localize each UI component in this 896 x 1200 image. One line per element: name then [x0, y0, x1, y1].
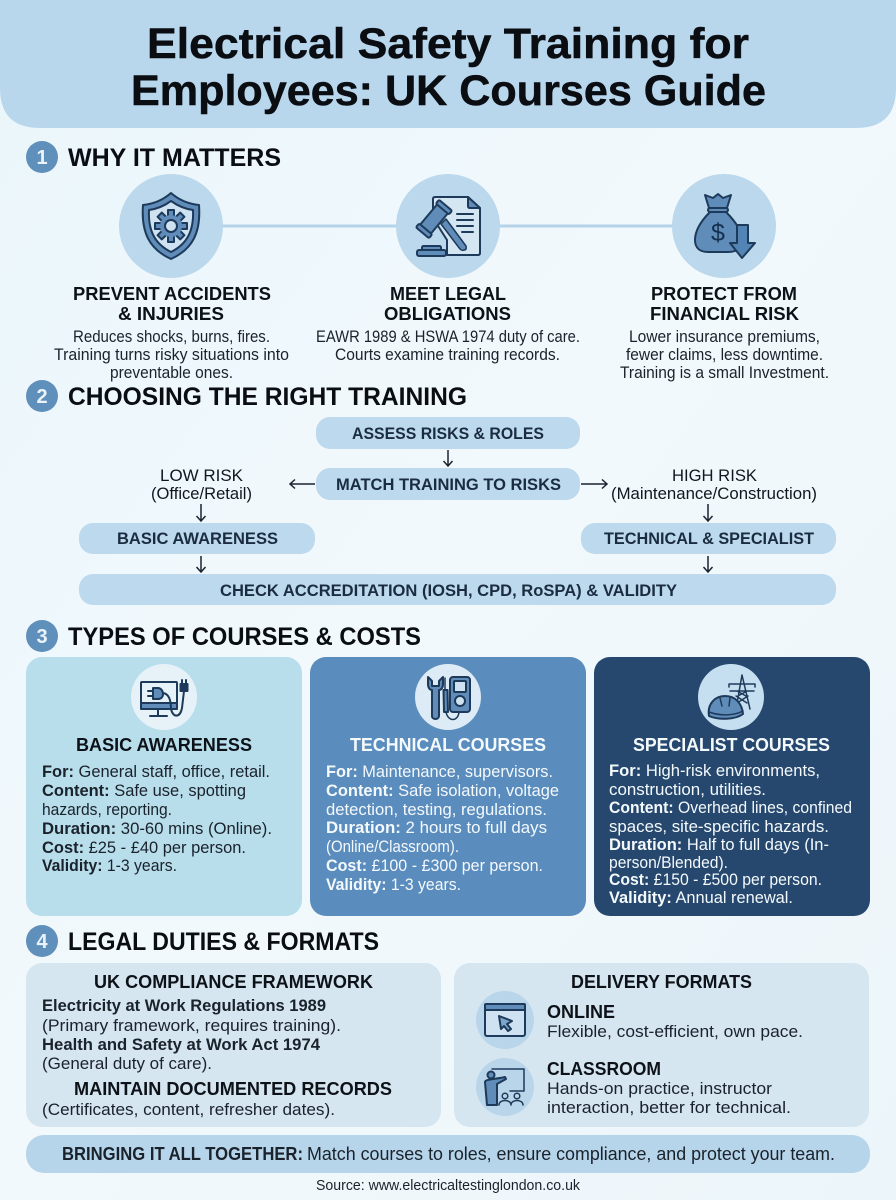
course details: basic awareness: Content: Safe use, spotting [42, 782, 246, 800]
course details: specialist: Duration: Half to full days (In- [609, 836, 829, 854]
label: high risk: (Maintenance/Construction) [611, 484, 817, 503]
panel: UK compliance framework: Electricity at Work Regulations 1989 [42, 997, 326, 1015]
source line: Source: www.electricaltestinglondon.co.uk [316, 1178, 581, 1194]
course details: specialist: For: High-risk environments, [609, 762, 820, 780]
arrow: low risk to basic awareness [196, 504, 206, 521]
icon: hard hat and pylon [698, 664, 764, 730]
item: protect from financial risk: Training is a small Investment. [620, 364, 829, 382]
item: protect from financial risk: PROTECT FROM [651, 284, 797, 304]
format: online: ONLINE [547, 1002, 615, 1022]
course details: basic awareness [42, 763, 272, 875]
section 1 heading: WHY IT MATTERS [68, 144, 281, 172]
panel: specialist courses [594, 657, 870, 916]
item: protect from financial risk [620, 284, 829, 382]
box: technical and specialist: TECHNICAL & SPECIALIST [604, 529, 815, 548]
section 2 heading: CHOOSING THE RIGHT TRAINING [68, 383, 467, 411]
item: meet legal obligations: EAWR 1989 & HSWA 1974 duty of care. [316, 328, 580, 346]
course details: basic awareness: For: General staff, office, retail. [42, 763, 270, 781]
box: technical and specialist [581, 523, 836, 554]
icon: money bag with down arrow [672, 174, 776, 278]
arrow: high risk to technical [704, 504, 712, 521]
panel: basic awareness course [26, 657, 302, 916]
item: prevent accidents: & INJURIES [118, 304, 224, 324]
panel: UK compliance framework: MAINTAIN DOCUMENTED RECORDS [74, 1079, 392, 1099]
heading: specialist courses: SPECIALIST COURSES [633, 735, 830, 755]
label: low risk: LOW RISK [160, 466, 244, 485]
course details: basic awareness: Duration: 30-60 mins (Online). [42, 820, 272, 838]
box: assess risks and roles: ASSESS RISKS & ROLES [352, 424, 544, 443]
summary bar [26, 1135, 870, 1173]
panel: UK compliance framework: UK COMPLIANCE FRAMEWORK [94, 972, 373, 992]
format: classroom: interaction, better for technical. [547, 1099, 791, 1117]
course details: specialist: person/Blended). [609, 854, 728, 872]
arrow: assess to match [444, 450, 452, 466]
item: meet legal obligations: OBLIGATIONS [384, 304, 511, 324]
panel: technical courses [310, 657, 586, 916]
box: basic awareness: BASIC AWARENESS [117, 529, 278, 548]
icon: classroom instructor [476, 1058, 534, 1116]
section 1: why it matters [26, 141, 829, 382]
icon: shield with gear [119, 174, 223, 278]
section 4 heading: LEGAL DUTIES & FORMATS [68, 928, 379, 956]
item: prevent accidents [54, 284, 289, 382]
course details: technical: (Online/Classroom). [326, 838, 459, 856]
course details: technical [326, 763, 559, 894]
format: online [547, 1002, 803, 1041]
course details: technical: For: Maintenance, supervisors. [326, 763, 553, 781]
section 3: types of courses and costs [26, 620, 870, 916]
section 3 heading: 3 [36, 626, 48, 648]
icon: wrench and multimeter [415, 664, 481, 730]
section 2 heading: 2 [36, 386, 48, 408]
item: protect from financial risk: Lower insurance premiums, [629, 328, 820, 346]
summary bar: Match courses to roles, ensure compliance, and protect your team. [307, 1144, 835, 1164]
arrow: basic to accreditation [196, 556, 206, 572]
item: prevent accidents: Training turns risky situations into [54, 346, 289, 364]
icon: browser with cursor [476, 991, 534, 1049]
panel: UK compliance framework: (Primary framework, requires training). [42, 1017, 341, 1035]
course details: specialist: spaces, site-specific hazards. [609, 818, 829, 836]
panel: UK compliance framework [26, 963, 441, 1127]
course details: technical: Content: Safe isolation, voltage [326, 782, 559, 800]
heading: technical courses: TECHNICAL COURSES [350, 735, 546, 755]
course details: technical: Duration: 2 hours to full days [326, 819, 547, 837]
panel: delivery formats [454, 963, 869, 1127]
format: classroom: CLASSROOM [547, 1059, 661, 1079]
arrow: to high risk [581, 480, 607, 488]
section 1 heading: 1 [36, 147, 48, 169]
title: Electrical Safety Training for [147, 20, 749, 68]
icon: monitor and plug [131, 664, 197, 730]
box: match training to risks: MATCH TRAINING TO RISKS [336, 475, 561, 494]
box: assess risks and roles [316, 417, 580, 449]
format: classroom: Hands-on practice, instructor [547, 1080, 773, 1098]
panel: delivery formats: DELIVERY FORMATS [571, 972, 752, 992]
box: basic awareness [79, 523, 315, 554]
format: classroom [547, 1059, 791, 1117]
item: protect from financial risk: fewer claims, less downtime. [626, 346, 823, 364]
summary bar: BRINGING IT ALL TOGETHER: [62, 1144, 303, 1164]
format: online: Flexible, cost-efficient, own pace. [547, 1023, 803, 1041]
course details: technical: detection, testing, regulations. [326, 801, 547, 819]
item: protect from financial risk: FINANCIAL RISK [650, 304, 799, 324]
box: match training to risks [316, 468, 580, 500]
box: check accreditation [79, 574, 836, 605]
course details: specialist: Validity: Annual renewal. [609, 889, 793, 907]
box: check accreditation: CHECK ACCREDITATION (IOSH, CPD, RoSPA) & VALIDITY [220, 581, 678, 600]
title: Employees: UK Courses Guide [131, 67, 766, 115]
icon: gavel and document [396, 174, 500, 278]
section 4: legal duties and formats [26, 925, 869, 1127]
course details: basic awareness: Cost: £25 - £40 per person. [42, 839, 246, 857]
course details: technical: Validity: 1-3 years. [326, 876, 461, 894]
label: low risk [151, 466, 252, 503]
heading: basic awareness: BASIC AWARENESS [76, 735, 252, 755]
panel: UK compliance framework: (General duty of care). [42, 1055, 212, 1073]
panel: UK compliance framework: Health and Safety at Work Act 1974 [42, 1036, 321, 1054]
course details: specialist: Cost: £150 - £500 per person. [609, 871, 822, 889]
item: meet legal obligations: Courts examine training records. [335, 346, 560, 364]
title banner [0, 0, 896, 128]
label: high risk [611, 466, 817, 503]
section 2: choosing the right training [26, 380, 836, 605]
course details: specialist: construction, utilities. [609, 781, 766, 799]
item: prevent accidents: Reduces shocks, burns, fires. [73, 328, 270, 346]
course details: basic awareness: Validity: 1-3 years. [42, 857, 177, 875]
arrow: to low risk [290, 480, 315, 488]
course details: specialist [609, 762, 852, 907]
label: high risk: HIGH RISK [672, 466, 758, 485]
course details: specialist: Content: Overhead lines, confined [609, 799, 852, 817]
icon: money bag with down arrow: $ [711, 219, 725, 247]
section 3 heading: TYPES OF COURSES & COSTS [68, 623, 421, 651]
item: meet legal obligations [316, 284, 580, 364]
item: prevent accidents: preventable ones. [110, 364, 233, 382]
item: prevent accidents: PREVENT ACCIDENTS [73, 284, 271, 304]
item: meet legal obligations: MEET LEGAL [390, 284, 506, 304]
course details: technical: Cost: £100 - £300 per person. [326, 857, 543, 875]
panel: UK compliance framework: (Certificates, content, refresher dates). [42, 1101, 335, 1119]
section 4 heading: 4 [36, 931, 48, 953]
course details: basic awareness: hazards, reporting. [42, 801, 172, 819]
label: low risk: (Office/Retail) [151, 484, 252, 503]
arrow: technical to accreditation [704, 556, 712, 572]
